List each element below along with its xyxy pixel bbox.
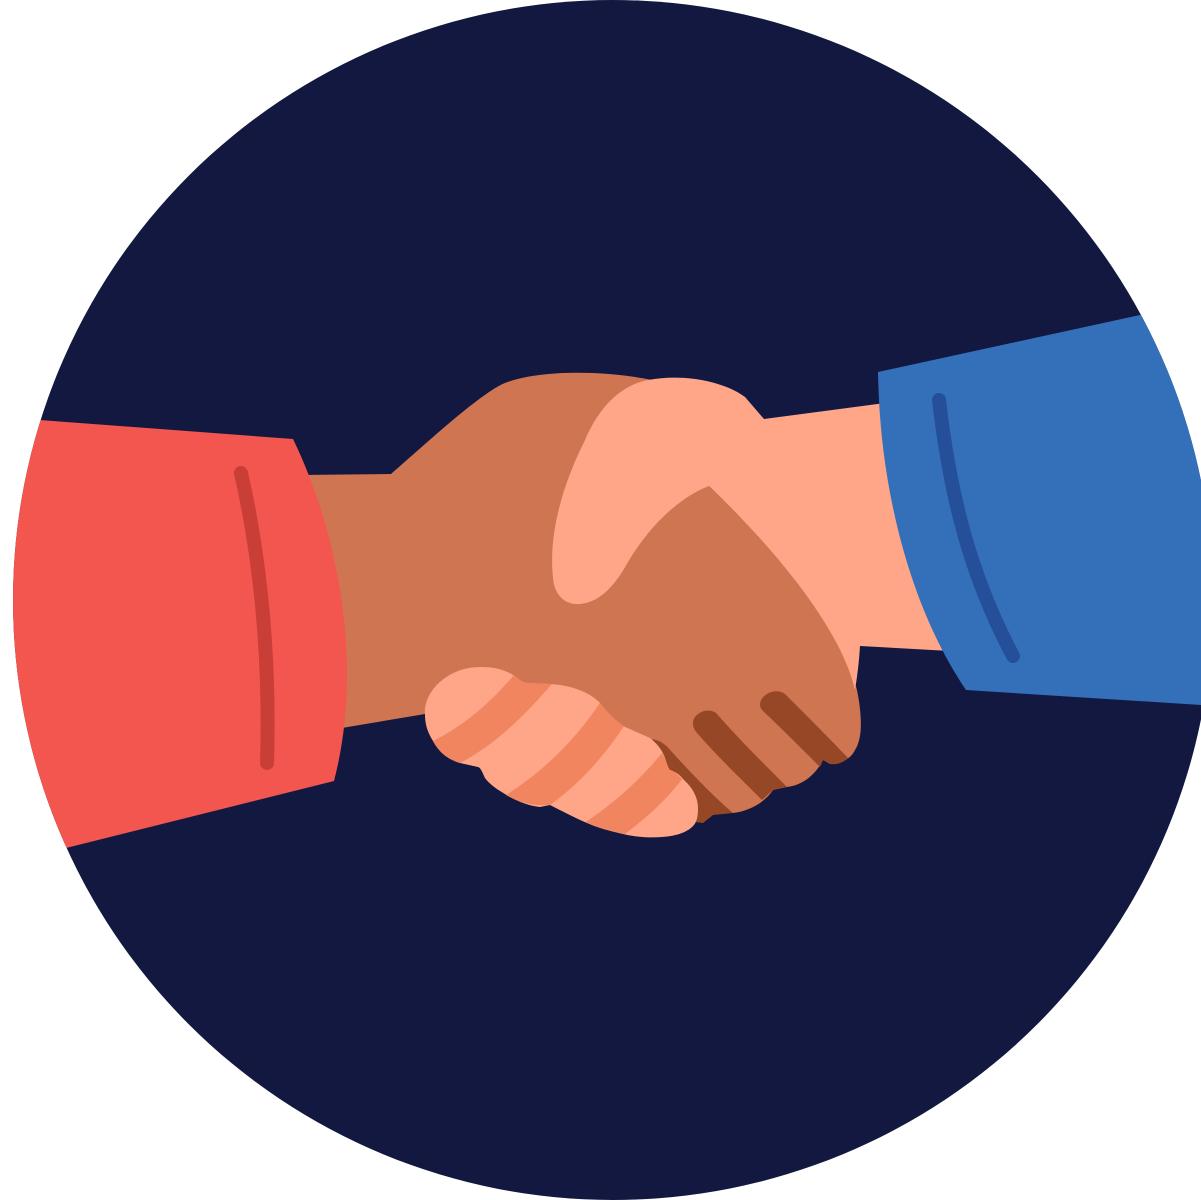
- light hand with thumb and wrist: [552, 378, 950, 690]
- red sleeve: [0, 417, 347, 860]
- stripe 1: [433, 675, 552, 763]
- blue sleeve: [878, 300, 1201, 707]
- light fingers: [425, 667, 698, 837]
- brown arm and hand: [300, 373, 861, 813]
- stripe 3: [586, 753, 682, 834]
- stripe 2: [506, 703, 624, 805]
- handshake group: [0, 300, 1201, 860]
- finger shading stripes: [433, 675, 682, 834]
- red sleeve crease: [241, 473, 268, 763]
- dark finger gap 1: [693, 711, 787, 800]
- dark finger gap 2: [760, 691, 848, 767]
- blue sleeve crease: [939, 400, 1013, 656]
- dark brown shadow finger: [652, 739, 733, 823]
